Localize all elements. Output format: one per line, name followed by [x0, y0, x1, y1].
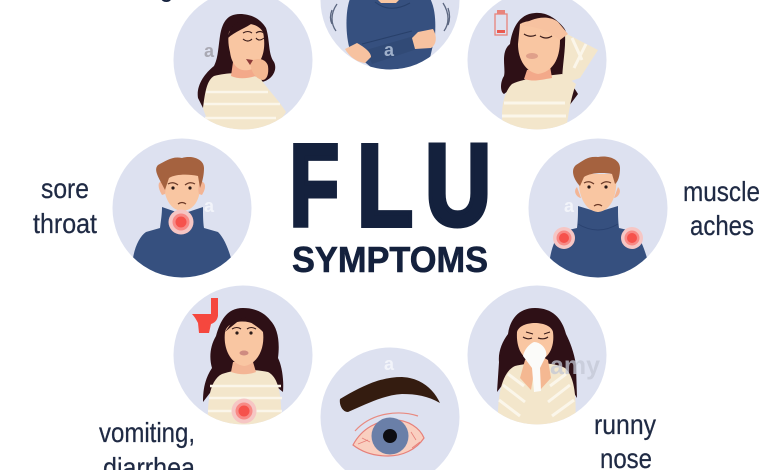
hair [156, 157, 204, 190]
subtitle: SYMPTOMS: SYMPTOMS [292, 239, 488, 280]
sweater [346, 0, 435, 70]
panel: coughing woman: a [204, 41, 215, 61]
facial features [171, 186, 175, 190]
icon: toilet [192, 298, 218, 333]
face [228, 24, 264, 70]
sweater [498, 363, 576, 425]
panel: sore throat man [112, 138, 252, 285]
face [579, 174, 616, 212]
panel: fatigue woman [467, 0, 607, 130]
panel: muscle aches man: a [564, 196, 575, 216]
facial features [587, 185, 591, 189]
pain spot [232, 398, 256, 424]
panel: muscle aches man [528, 138, 668, 285]
label: vomiting, diarrhea: vomiting, [99, 417, 195, 448]
label: sore throat: sore [41, 173, 89, 204]
panel: chills man: a [384, 40, 395, 60]
closed eyes and mouth [524, 34, 552, 38]
hand on forehead [528, 18, 568, 40]
title: FLU: L [357, 121, 413, 251]
sweater [550, 206, 647, 285]
raised sleeve [562, 33, 598, 84]
face [518, 21, 560, 74]
hair [497, 308, 577, 398]
panel: vomiting woman [173, 285, 313, 428]
panel: runny nose woman [467, 285, 607, 425]
pupil [383, 429, 397, 443]
iris [372, 418, 408, 454]
tissue [523, 342, 546, 392]
chin [377, 0, 400, 3]
shiver lines [330, 3, 450, 31]
label: runny nose: runny [594, 409, 656, 440]
icon: low battery [495, 10, 507, 35]
title: FLU: F [290, 121, 339, 251]
label: runny nose [594, 409, 656, 470]
face [225, 322, 263, 366]
eyelid crease [355, 413, 418, 431]
hand at mouth [250, 59, 268, 80]
neck [524, 68, 552, 80]
pain spot [168, 210, 194, 234]
watermark: amy [550, 350, 601, 380]
pain spot: right shoulder [621, 227, 643, 249]
hair [198, 14, 275, 108]
label: muscle aches: muscle [683, 176, 760, 207]
hands [345, 43, 371, 63]
face [517, 323, 553, 362]
closed eyes [243, 32, 264, 41]
sweater [208, 370, 281, 428]
hands [520, 356, 551, 390]
sweater [133, 207, 231, 285]
face [164, 174, 200, 211]
label: muscle aches: aches [690, 210, 754, 241]
title: FLU: U [425, 121, 491, 251]
facial features [235, 331, 239, 335]
label: muscle aches [683, 176, 760, 241]
panel: chills man [320, 0, 460, 70]
panel: sore throat man: a [204, 196, 215, 216]
panel: red eye: a [384, 354, 395, 374]
eyebrow [340, 377, 440, 412]
neck [231, 362, 256, 374]
hair [203, 308, 283, 402]
crossed arms [368, 36, 416, 64]
sweater [502, 74, 576, 130]
hair [573, 157, 620, 186]
label: vomiting, diarrhea [99, 417, 195, 470]
panel: red eye [320, 347, 460, 470]
neck [231, 62, 256, 78]
eye white [353, 420, 424, 456]
pain spot: left shoulder [553, 227, 575, 249]
hair [501, 13, 578, 110]
label: sore throat: throat [33, 208, 97, 239]
title: FLU [290, 121, 491, 251]
sweater [203, 73, 286, 135]
label: sore throat [33, 173, 97, 239]
panel: coughing woman [173, 0, 313, 135]
